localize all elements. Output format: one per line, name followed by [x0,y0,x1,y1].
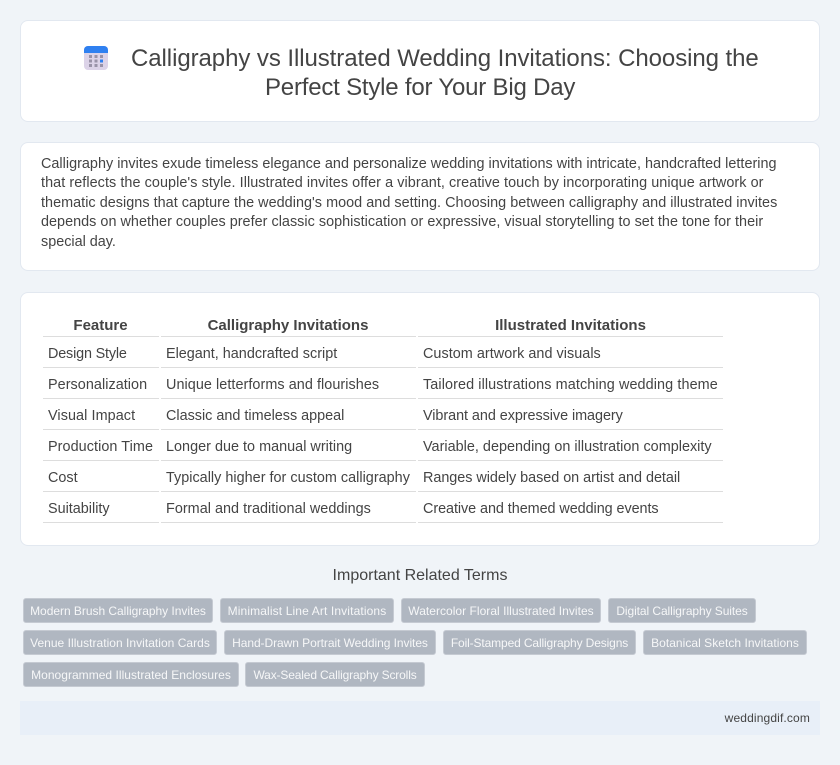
comparison table: Unique letterforms and flourishes [166,377,379,393]
comparison table: Feature [73,317,128,334]
panel: introduction [20,142,820,271]
panel: comparison table [20,292,820,546]
comparison table: Illustrated Invitations [495,317,646,334]
tags: related terms: Hand-Drawn Portrait Wedding Invites [232,636,428,650]
comparison table: Production Time [48,439,153,455]
tags: related terms: Foil-Stamped Calligraphy Designs [451,636,628,650]
panel: header [20,20,820,122]
comparison table: Visual Impact [48,408,135,424]
tags: related terms: Minimalist Line Art Invitations [228,604,386,618]
tags: related terms: Modern Brush Calligraphy Invites [30,604,206,618]
icon: calendar [84,46,108,70]
introduction text: thematic designs that capture the wedding's mood and setting. Choosing between calligraphy and illustrated invites [41,195,777,211]
comparison table: Vibrant and expressive imagery [423,408,623,424]
comparison table [43,317,723,523]
comparison table: Ranges widely based on artist and detail [423,470,680,486]
tags: related terms: Botanical Sketch Invitations [651,636,799,650]
tags: related terms: Monogrammed Illustrated Enclosures [31,668,231,682]
tags: related terms: Venue Illustration Invitation Cards [30,636,210,650]
comparison table: Custom artwork and visuals [423,346,601,362]
tags: related terms: Watercolor Floral Illustrated Invites [408,604,594,618]
comparison table: Tailored illustrations matching wedding theme [423,377,718,393]
title [131,45,759,101]
comparison table: Longer due to manual writing [166,439,352,455]
comparison table: Design Style [48,346,127,362]
tags: related terms: Digital Calligraphy Suites [616,604,748,618]
comparison table: Calligraphy Invitations [208,317,368,334]
footer text: weddingdif.com [725,711,810,725]
heading: related terms: Important Related Terms [333,567,507,584]
title: Calligraphy vs Illustrated Wedding Invitations: Choosing the [131,45,759,72]
comparison table: Elegant, handcrafted script [166,346,337,362]
comparison table: Classic and timeless appeal [166,408,344,424]
comparison table: Typically higher for custom calligraphy [166,470,410,486]
comparison table: Variable, depending on illustration complexity [423,439,712,455]
footer [20,701,820,735]
comparison table: Personalization [48,377,147,393]
title: Perfect Style for Your Big Day [265,74,575,101]
introduction text: Calligraphy invites exude timeless elegance and personalize wedding invitations with intricate, handcrafted lettering [41,156,777,172]
introduction text: that reflects the couple's style. Illustrated invites offer a vibrant, creative touch by incorporating unique artwork or [41,175,764,191]
introduction text [41,156,777,250]
comparison table: Cost [48,470,78,486]
introduction text: special day. [41,234,116,250]
tags: related terms [23,598,807,687]
tags: related terms: Wax-Sealed Calligraphy Scrolls [253,668,417,682]
comparison table: Creative and themed wedding events [423,501,659,517]
comparison table: Suitability [48,501,110,517]
comparison table: Formal and traditional weddings [166,501,371,517]
introduction text: depends on whether couples prefer classic sophistication or expressive, visual storytelling to set the tone for their [41,214,763,230]
